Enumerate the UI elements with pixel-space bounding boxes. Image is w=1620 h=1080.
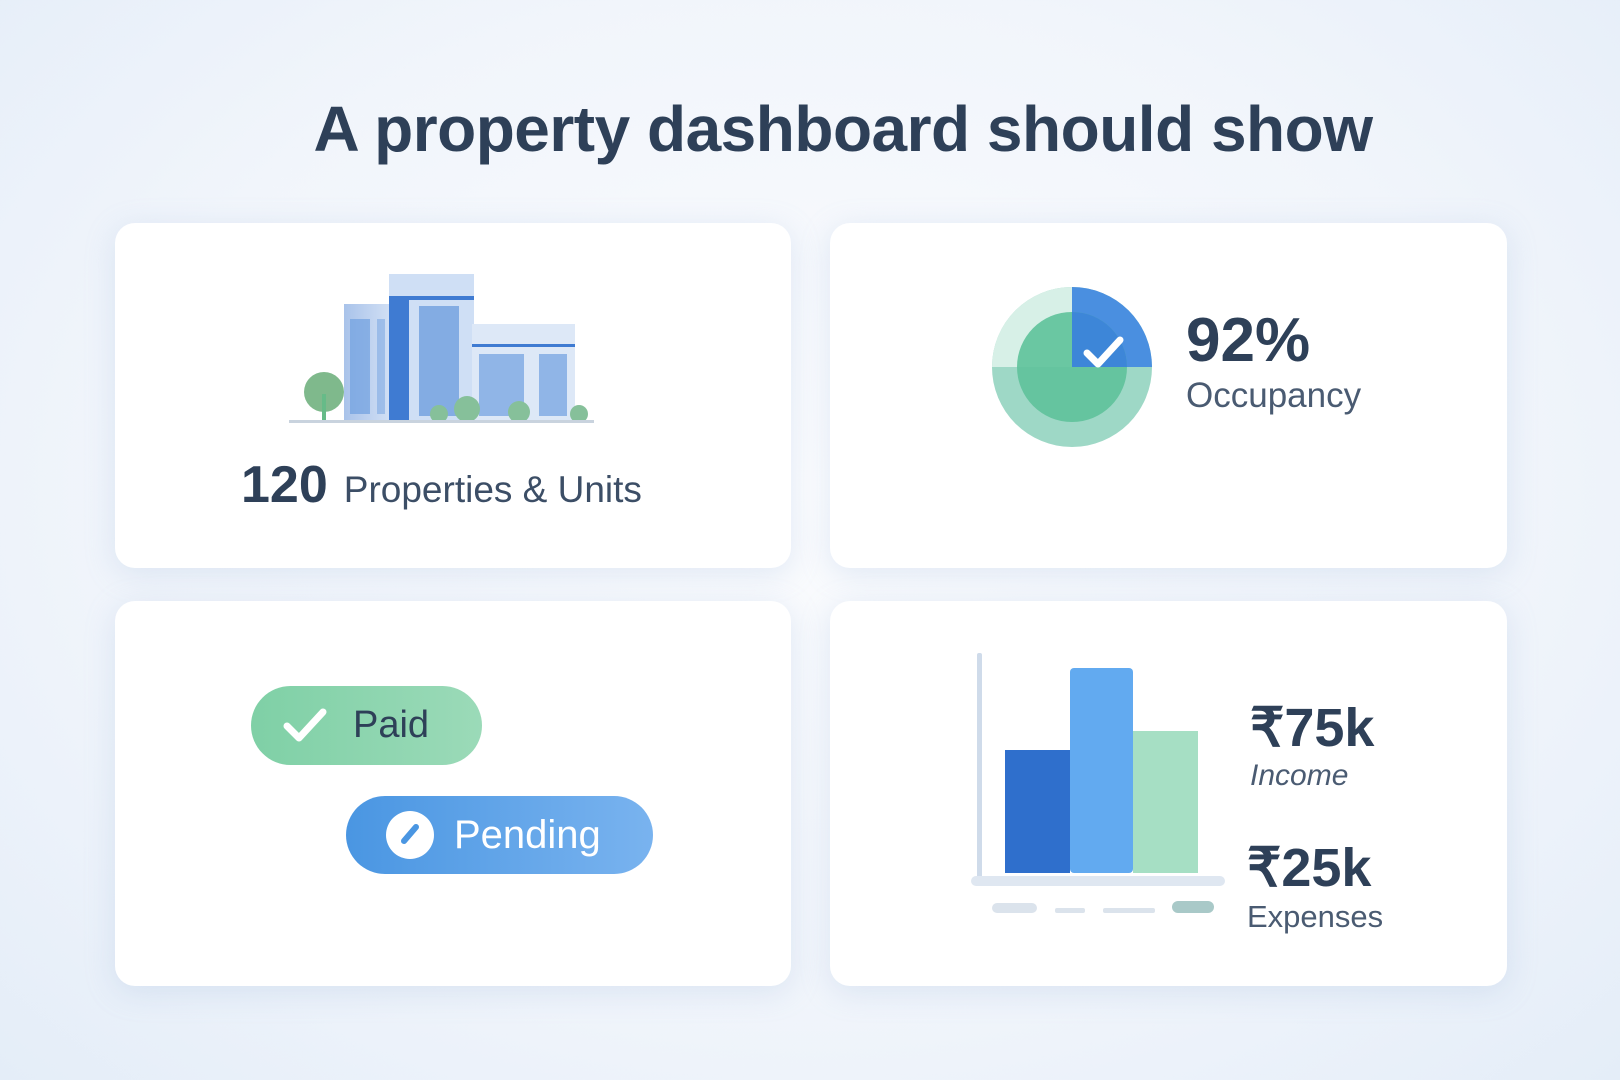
panel: payments — [115, 601, 791, 986]
stat: income: ₹75k — [1250, 698, 1374, 758]
stat: income — [1250, 698, 1374, 792]
panel: income and expenses — [830, 601, 1507, 986]
icon: buildings — [289, 274, 594, 423]
stat: expenses — [1247, 838, 1383, 934]
chart: occupancy donut — [992, 287, 1152, 447]
badge: paid — [251, 686, 482, 765]
stat: expenses: ₹25k — [1247, 838, 1371, 898]
badge: pending — [346, 796, 653, 874]
badge: paid: Paid — [353, 704, 429, 746]
stat: 92% occupancy — [1186, 306, 1361, 415]
panel: occupancy — [830, 223, 1507, 568]
chart: bar chart — [971, 653, 1225, 913]
badge: pending: Pending — [454, 812, 601, 856]
stat: 92% occupancy: 92% — [1186, 306, 1310, 375]
stat: 92% occupancy: Occupancy — [1186, 376, 1361, 415]
stat: 120 properties: 120 Properties & Units — [241, 456, 642, 514]
panel: properties — [115, 223, 791, 568]
stat: income: Income — [1250, 759, 1348, 792]
title: A property dashboard should show — [313, 93, 1373, 165]
stat: expenses: Expenses — [1247, 899, 1383, 934]
